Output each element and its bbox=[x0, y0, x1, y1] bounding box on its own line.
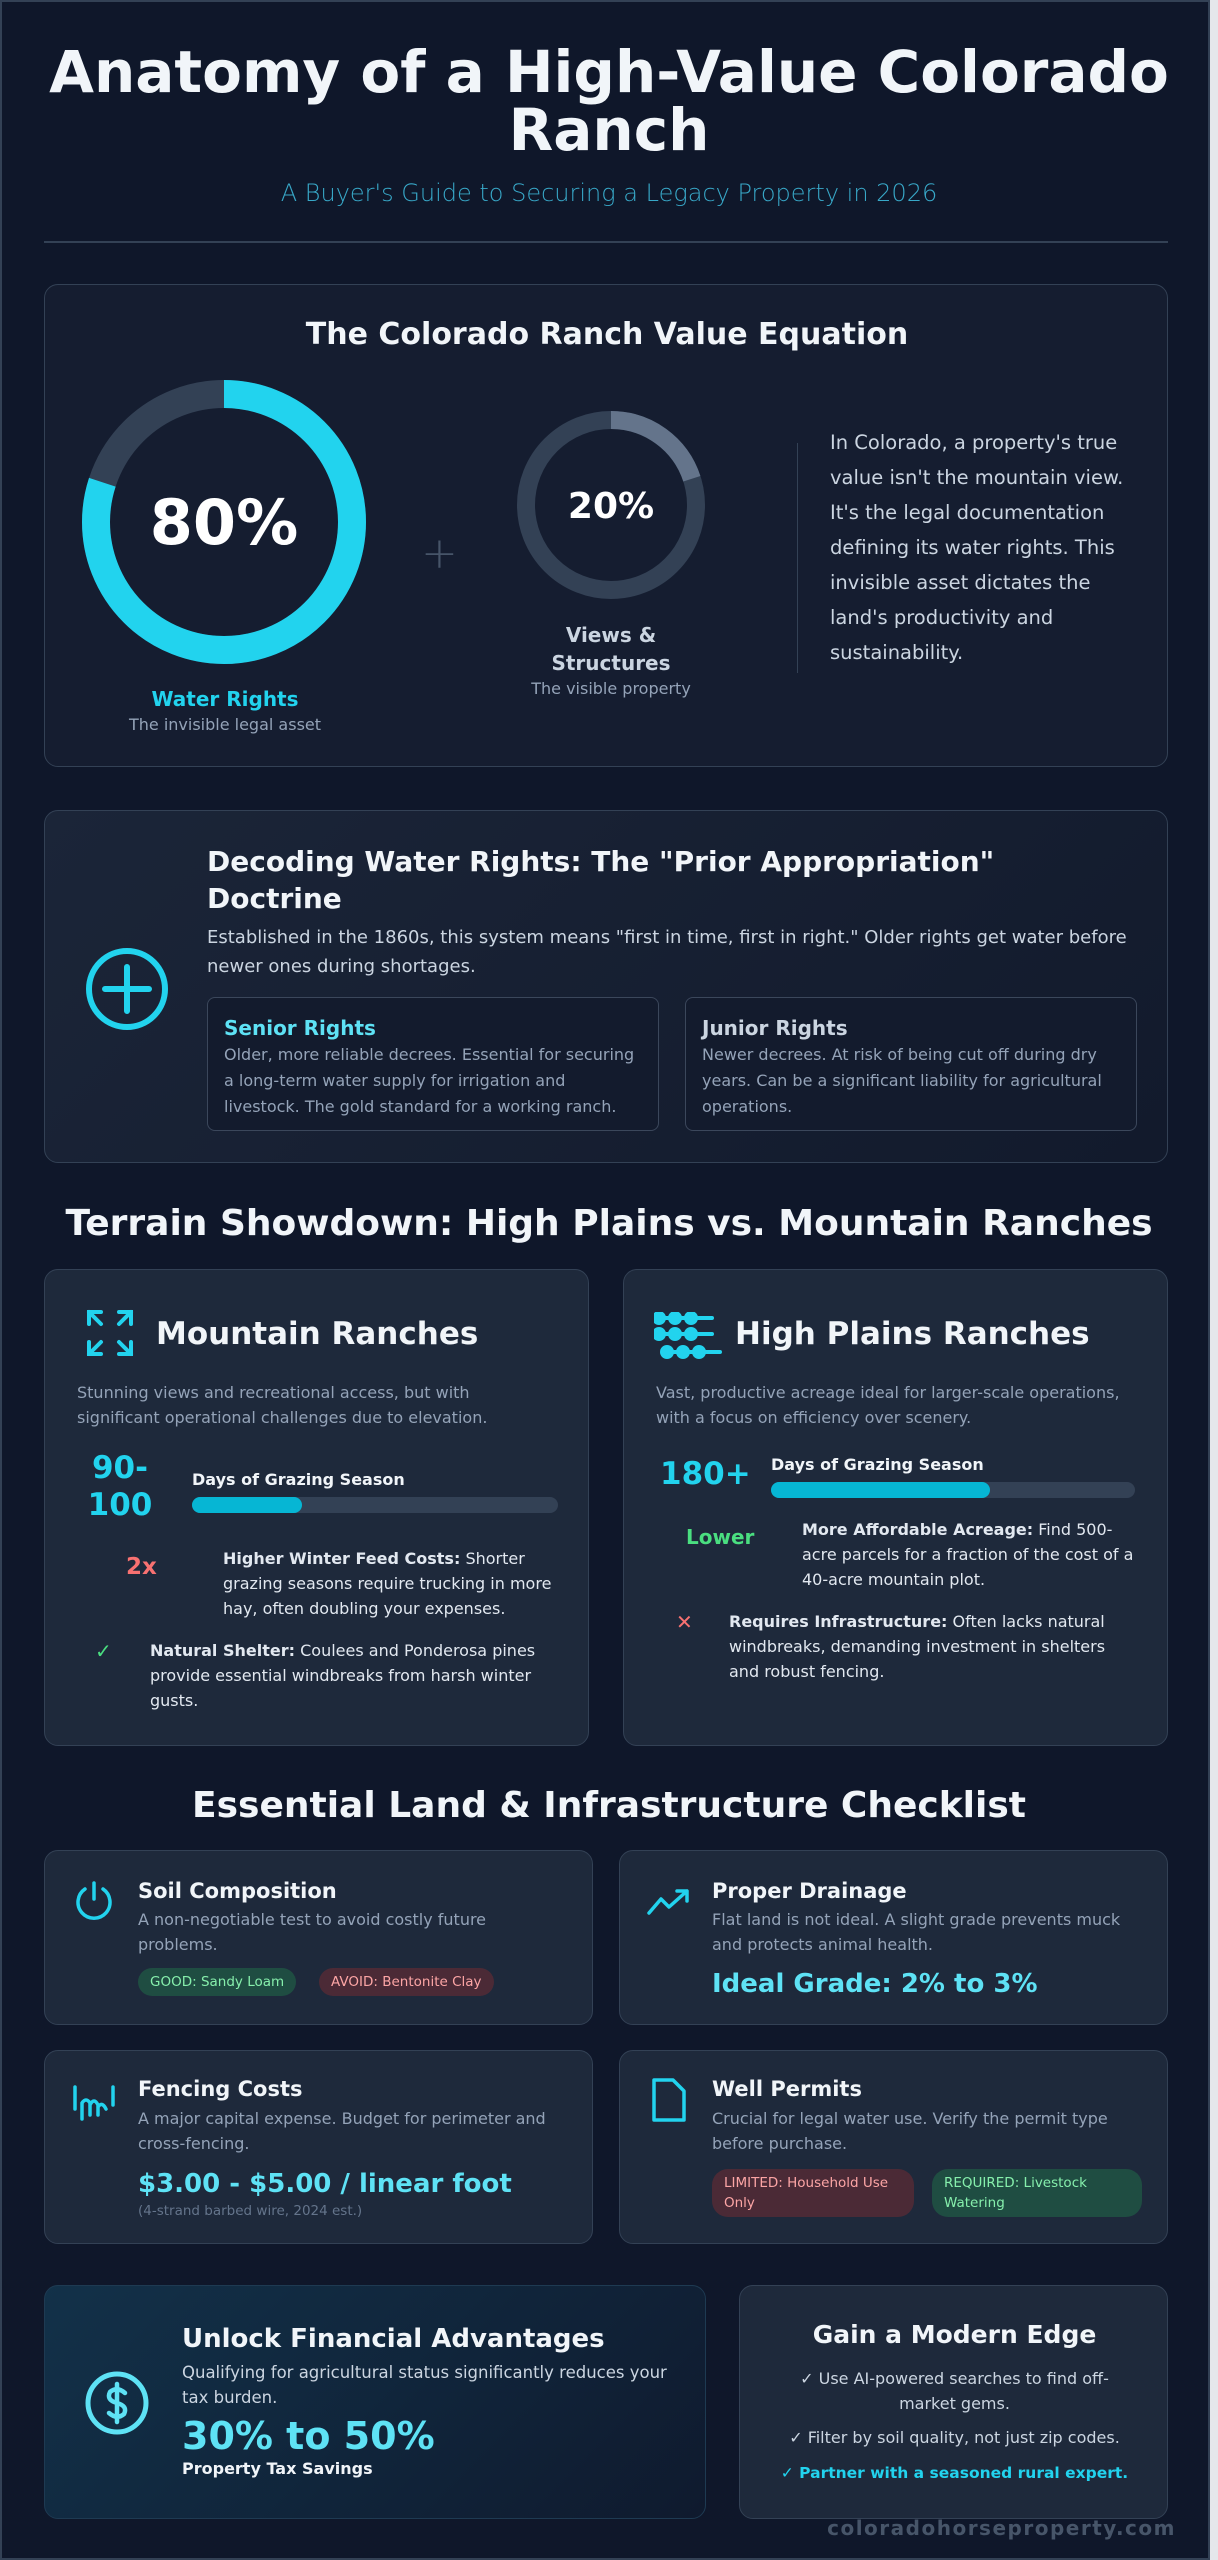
text block: explanation: In Colorado, a property's true value isn't the mountain view. It's the legal documentation defining its water rights. This invisible asset dictates the land's productivity and sustainability. bbox=[830, 431, 1123, 664]
icon: power bbox=[76, 1881, 112, 1920]
card: soil composition: A non-negotiable test to avoid costly future problems. bbox=[138, 1910, 486, 1954]
text block: Established in the 1860s, this system means "first in time, first in right." Older rights get water before newer ones during shortages. bbox=[207, 927, 1127, 977]
section heading: checklist: Essential Land & Infrastructure Checklist bbox=[192, 1785, 1026, 1826]
card: well permits bbox=[619, 2050, 1168, 2244]
icon: dollar coin bbox=[86, 2372, 148, 2434]
icon: fence hand bbox=[73, 2085, 115, 2121]
tags: soil bbox=[138, 1968, 296, 1996]
donut chart: 80% bbox=[82, 380, 366, 664]
subtitle: A Buyer's Guide to Securing a Legacy Property in 2026 bbox=[281, 179, 937, 207]
box: senior rights: livestock. The gold standard for a working ranch. bbox=[224, 1097, 616, 1116]
panel: modern edge: Gain a Modern Edge bbox=[813, 2320, 1096, 2349]
box: junior rights bbox=[685, 997, 1137, 1131]
card: fencing costs: (4-strand barbed wire, 2024 est.) bbox=[138, 2203, 362, 2219]
card: proper drainage: Flat land is not ideal. A slight grade prevents muck and protects animal health. bbox=[712, 1910, 1120, 1954]
bar: grazing 60% bbox=[771, 1482, 1135, 1498]
panel: mountain ranches bbox=[44, 1269, 589, 1746]
stat: grazing days: 100 bbox=[88, 1487, 152, 1523]
label: views & structures bbox=[531, 623, 691, 698]
description: Vast, productive acreage ideal for larger-scale operations, with a focus on efficiency over scenery. bbox=[656, 1383, 1120, 1427]
panel: financial advantages: Property Tax Savings bbox=[182, 2459, 373, 2478]
stat: lower cost: More Affordable Acreage: Find 500-acre parcels for a fraction of the cost of a 40-acre mountain plot. bbox=[802, 1520, 1133, 1589]
card: well permits: REQUIRED: Livestock Watering bbox=[944, 2175, 1087, 2211]
panel: high plains ranches: Days of Grazing Season bbox=[771, 1455, 984, 1474]
tags: permits: LIMITED: Household Use Only bbox=[724, 2175, 888, 2211]
item: infrastructure: ✕ bbox=[676, 1610, 693, 1634]
card: soil composition: AVOID: Bentonite Clay bbox=[331, 1974, 482, 1990]
stat: grazing days: 90- bbox=[92, 1450, 148, 1486]
donut chart: 80%: 80% bbox=[150, 486, 298, 559]
label: water rights bbox=[128, 687, 321, 734]
tags: permits bbox=[712, 2169, 914, 2217]
stat: grazing days bbox=[88, 1450, 152, 1523]
item: natural shelter: ✓ bbox=[95, 1639, 112, 1663]
stat: 180+: 180+ bbox=[660, 1456, 751, 1492]
stat: fence price: $3.00 - $5.00 / linear foot bbox=[138, 2169, 512, 2199]
tips list: ✓ Filter by soil quality, not just zip codes. bbox=[789, 2428, 1120, 2447]
panel: high plains ranches bbox=[623, 1269, 1168, 1746]
icon: trend arrow bbox=[647, 1889, 689, 1915]
tips list: ✓ Partner with a seasoned rural expert. bbox=[781, 2464, 1128, 2482]
card: well permits: Well Permits bbox=[712, 2077, 862, 2101]
panel: financial advantages bbox=[44, 2285, 706, 2519]
title: Ranch bbox=[509, 96, 709, 164]
card: soil composition: Soil Composition bbox=[138, 1879, 337, 1903]
panel: financial advantages: Unlock Financial Advantages bbox=[182, 2324, 605, 2354]
panel: mountain ranches: Days of Grazing Season bbox=[192, 1470, 405, 1489]
title bbox=[49, 38, 1169, 164]
donut chart: 20% bbox=[517, 411, 705, 599]
box: junior rights: Junior Rights bbox=[702, 1016, 848, 1040]
tips list bbox=[781, 2369, 1128, 2482]
box: senior rights: Older, more reliable decrees. Essential for securing a long-term water supply for irrigation and bbox=[224, 1045, 634, 1090]
card: fencing costs bbox=[44, 2050, 593, 2244]
stat: ideal grade: Ideal Grade: 2% to 3% bbox=[712, 1969, 1038, 1999]
label: water rights: The invisible legal asset bbox=[129, 715, 321, 734]
label: water rights: Water Rights bbox=[151, 687, 299, 711]
item: natural shelter: Natural Shelter: Coulees and Ponderosa pines provide essential windbreaks from harsh winter gusts. bbox=[150, 1641, 535, 1710]
card: proper drainage bbox=[619, 1850, 1168, 2025]
panel: financial advantages: Qualifying for agricultural status significantly reduces your tax burden. bbox=[182, 2363, 667, 2407]
card: proper drainage: Proper Drainage bbox=[712, 1879, 907, 1903]
donut chart: 20%: 20% bbox=[568, 486, 654, 527]
icon: circle plus bbox=[86, 948, 168, 1030]
stat: tax savings: 30% to 50% bbox=[182, 2414, 435, 2458]
heading: Decoding Water Rights: The "Prior Appropriation" Doctrine bbox=[207, 845, 994, 915]
bar: grazing 30% bbox=[192, 1497, 558, 1513]
label: views & structures: Structures bbox=[551, 651, 671, 675]
tips list: ✓ Use AI-powered searches to find off-market gems. bbox=[800, 2369, 1109, 2413]
card: fencing costs: A major capital expense. Budget for perimeter and cross-fencing. bbox=[138, 2109, 546, 2153]
tags: soil: GOOD: Sandy Loam bbox=[150, 1974, 284, 1990]
stat: lower cost: Lower bbox=[686, 1525, 754, 1549]
heading: Mountain Ranches bbox=[156, 1316, 478, 1352]
card: well permits: Crucial for legal water use. Verify the permit type before purchase. bbox=[712, 2109, 1108, 2153]
panel: prior appropriation bbox=[44, 810, 1168, 1163]
label: views & structures: The visible property bbox=[531, 679, 691, 698]
label: views & structures: Views & bbox=[566, 623, 656, 647]
icon: sliders bbox=[654, 1312, 722, 1359]
box: junior rights: Newer decrees. At risk of being cut off during dry years. Can be a significant liability for agricultural operations. bbox=[702, 1045, 1102, 1116]
panel: modern edge bbox=[739, 2285, 1168, 2519]
card: soil composition bbox=[44, 1850, 593, 2025]
item: infrastructure: Requires Infrastructure: Often lacks natural windbreaks, demanding investment in shelters and robust fencing. bbox=[729, 1612, 1105, 1681]
icon: expand arrows bbox=[86, 1310, 134, 1356]
box: senior rights: Senior Rights bbox=[224, 1016, 376, 1040]
title: Anatomy of a High-Value Colorado bbox=[49, 38, 1169, 106]
description: Stunning views and recreational access, but with significant operational challenges due to elevation. bbox=[77, 1383, 487, 1427]
panel heading: The Colorado Ranch Value Equation bbox=[306, 317, 908, 352]
card: fencing costs: Fencing Costs bbox=[138, 2077, 303, 2101]
box: senior rights bbox=[207, 997, 659, 1131]
heading: High Plains Ranches bbox=[735, 1316, 1090, 1352]
section heading: terrain showdown: Terrain Showdown: High Plains vs. Mountain Ranches bbox=[65, 1203, 1153, 1244]
footer: website: coloradohorseproperty.com bbox=[827, 2516, 1176, 2540]
plus sign: + bbox=[421, 528, 458, 579]
stat: 2x feed costs: 2x bbox=[126, 1554, 157, 1580]
panel: value equation bbox=[44, 284, 1168, 767]
stat: 2x feed costs: Higher Winter Feed Costs: Shorter grazing seasons require trucking in more hay, often doubling your expenses. bbox=[223, 1549, 551, 1618]
icon: document bbox=[652, 2078, 686, 2122]
